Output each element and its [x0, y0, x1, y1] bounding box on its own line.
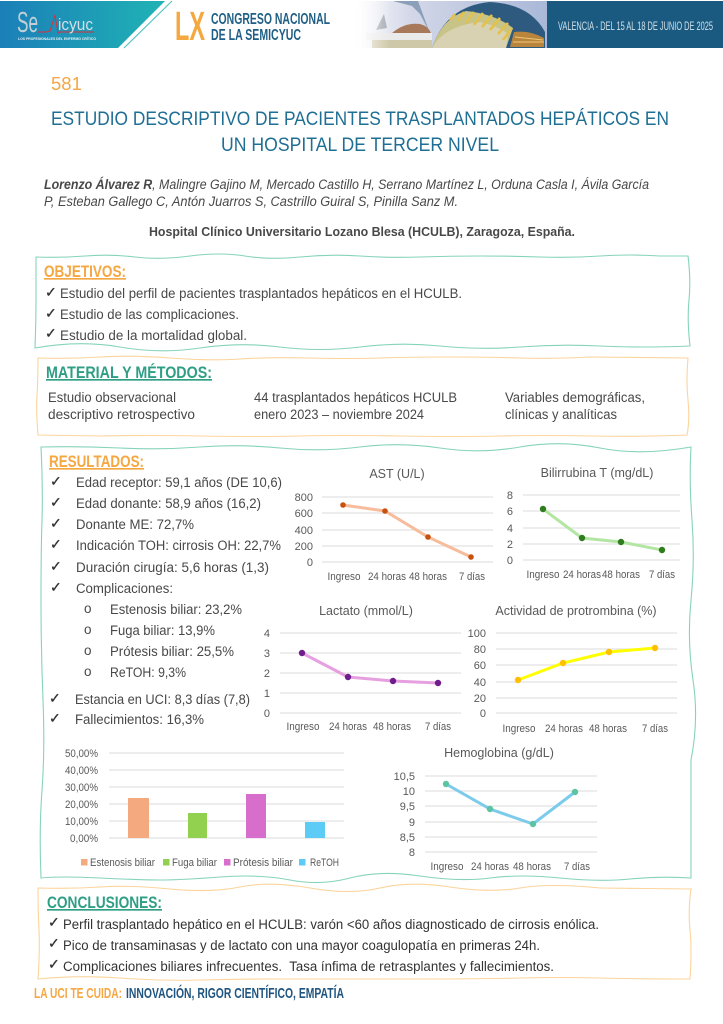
- results list: Prótesis biliar: 25,5%: [110, 644, 234, 659]
- chart: bilirrubina: [507, 466, 680, 581]
- chart: lactato: 0: [264, 708, 270, 720]
- chart: actividad de protrombina: 40: [474, 677, 486, 689]
- chart: actividad de protrombina: 60: [474, 660, 486, 672]
- results list: ✓: [50, 559, 62, 575]
- authors: Lorenzo Álvarez R, Malingre Gajino M, Mercado Castillo H, Serrano Martínez L, Orduna Casla I, Ávila García: [44, 177, 649, 192]
- chart: AST: 400: [295, 525, 313, 537]
- chart: hemoglobina: 9: [409, 817, 415, 829]
- logo panel: Semicyuc: Se: [17, 7, 38, 39]
- chart: bilirrubina: 24 horas: [563, 569, 601, 581]
- results list: Donante ME: 72,7%: [76, 517, 194, 532]
- objectives list: ✓: [45, 285, 57, 301]
- logo panel: Semicyuc: LOS PROFESIONALES DEL ENFERMO CRÍTICO: [18, 36, 96, 41]
- method: design: Estudio observacional: [48, 390, 176, 405]
- congress title: LX: [175, 3, 205, 49]
- results list: Fallecimientos: 16,3%: [75, 712, 204, 727]
- bar chart: complicaciones: 30,00%: [65, 782, 98, 794]
- chart legend: Fuga biliar: [172, 857, 217, 869]
- chart: AST: 7 días: [459, 571, 485, 583]
- chart legend: Prótesis biliar: [233, 857, 293, 869]
- header photo: Valencia architecture: [352, 1, 548, 48]
- method: variables: [505, 390, 645, 422]
- method: design: descriptivo retrospectivo: [48, 407, 195, 422]
- bar chart: complicaciones: 40,00%: [65, 765, 98, 777]
- congress title: DE LA SEMICYUC: [211, 27, 301, 44]
- footer tagline: LA UCI TE CUIDA:: [34, 985, 122, 1002]
- chart: actividad de protrombina: 80: [474, 644, 486, 656]
- logo panel: Semicyuc: icyuc: [58, 15, 93, 34]
- results list: Indicación TOH: cirrosis OH: 22,7%: [76, 538, 281, 553]
- conclusions list: Complicaciones biliares infrecuentes. Tasa ínfima de retrasplantes y fallecimientos.: [63, 959, 554, 974]
- results list: ✓: [50, 580, 62, 596]
- chart: hemoglobina: 9,5: [400, 801, 415, 813]
- chart: bilirrubina: 0: [507, 555, 513, 567]
- chart: actividad de protrombina: Ingreso: [502, 723, 536, 735]
- results list: o: [84, 601, 92, 616]
- footer tagline: [34, 984, 344, 1002]
- bar chart: complicaciones: [65, 748, 344, 869]
- chart: hemoglobina: Ingreso: [430, 861, 464, 873]
- chart: lactato: Lactato (mmol/L): [319, 604, 413, 618]
- method: design: [48, 390, 195, 422]
- chart: AST: AST (U/L): [369, 467, 425, 481]
- panel: conclusiones: [38, 884, 691, 980]
- header banner: [0, 1, 723, 49]
- heading: material y métodos: MATERIAL Y MÉTODOS:: [46, 363, 212, 382]
- chart: lactato: 2: [264, 668, 270, 680]
- conclusions list: Perfil trasplantado hepático en el HCULB: varón <60 años diagnosticado de cirrosis enólica.: [63, 917, 599, 932]
- objectives list: Estudio de la mortalidad global.: [60, 328, 247, 343]
- chart: lactato: Ingreso: [286, 721, 320, 733]
- results list: Duración cirugía: 5,6 horas (1,3): [76, 560, 269, 575]
- objectives list: Estudio del perfil de pacientes trasplantados hepáticos en el HCULB.: [60, 286, 462, 301]
- objectives list: ✓: [45, 306, 57, 322]
- bar chart: complicaciones: 20,00%: [65, 799, 98, 811]
- chart: hemoglobina: 48 horas: [513, 861, 551, 873]
- results list: Estancia en UCI: 8,3 días (7,8): [75, 692, 250, 707]
- bar chart: complicaciones: 10,00%: [65, 816, 98, 828]
- results list: ✓: [49, 691, 61, 707]
- title: [51, 107, 669, 156]
- chart: actividad de protrombina: 0: [480, 708, 486, 720]
- chart: AST: 200: [295, 541, 313, 553]
- results list: ✓: [50, 495, 62, 511]
- conclusions list: Pico de transaminasas y de lactato con una mayor coagulopatía en primeras 24h.: [63, 938, 540, 953]
- chart: AST: [295, 467, 493, 583]
- chart: AST: 24 horas: [368, 571, 406, 583]
- chart: hemoglobina: 10: [403, 786, 415, 798]
- title: UN HOSPITAL DE TERCER NIVEL: [221, 134, 499, 156]
- conclusions list: [48, 915, 599, 974]
- conclusions list: ✓: [48, 936, 60, 952]
- chart: bilirrubina: 2: [507, 539, 513, 551]
- method: variables: clínicas y analíticas: [505, 407, 617, 422]
- chart: lactato: [264, 604, 461, 733]
- bar chart: complicaciones: 0,00%: [70, 833, 98, 845]
- results list: o: [84, 622, 92, 637]
- results list: Edad receptor: 59,1 años (DE 10,6): [76, 475, 282, 490]
- chart: bilirrubina: Ingreso: [526, 569, 560, 581]
- panel: material y métodos: [37, 356, 689, 436]
- chart: bilirrubina: 6: [507, 506, 513, 518]
- bar chart: complicaciones: 50,00%: [65, 748, 98, 760]
- heading: conclusiones: CONCLUSIONES:: [47, 894, 162, 912]
- chart: bilirrubina: 48 horas: [602, 569, 640, 581]
- chart: AST: Ingreso: [328, 571, 360, 583]
- results list: Complicaciones:: [76, 581, 173, 596]
- chart: bilirrubina: 8: [507, 490, 513, 502]
- objectives list: [45, 285, 462, 343]
- chart: lactato: 1: [264, 688, 270, 700]
- chart: bilirrubina: Bilirrubina T (mg/dL): [541, 466, 653, 480]
- chart: lactato: 4: [264, 628, 270, 640]
- chart: AST: 48 horas: [409, 571, 447, 583]
- chart: actividad de protrombina: 20: [474, 693, 486, 705]
- results list: Estenosis biliar: 23,2%: [110, 602, 242, 617]
- panel: resultados: [40, 444, 696, 883]
- chart legend: ReTOH: [310, 857, 339, 869]
- chart: lactato: 3: [264, 648, 270, 660]
- chart: lactato: 24 horas: [329, 721, 367, 733]
- method: sample: [254, 390, 457, 422]
- chart: lactato: 48 horas: [373, 721, 411, 733]
- conclusions list: ✓: [48, 957, 60, 973]
- congress title: CONGRESO NACIONAL: [211, 11, 330, 28]
- results list: Fuga biliar: 13,9%: [110, 623, 215, 638]
- abstract number: 581: [51, 73, 82, 94]
- chart legend: [81, 857, 339, 869]
- chart: hemoglobina: 7 días: [564, 861, 590, 873]
- chart: lactato: 7 días: [425, 721, 451, 733]
- chart: AST: 600: [295, 508, 313, 520]
- heading: objetivos: OBJETIVOS:: [44, 263, 126, 281]
- results list: ✓: [50, 474, 62, 490]
- results list: ✓: [50, 516, 62, 532]
- authors: [44, 177, 649, 209]
- affiliation: Hospital Clínico Universitario Lozano Blesa (HCULB), Zaragoza, España.: [149, 225, 575, 239]
- congress title: [175, 3, 330, 49]
- chart: actividad de protrombina: 48 horas: [589, 723, 627, 735]
- objectives list: Estudio de las complicaciones.: [60, 307, 239, 322]
- logo panel: Semicyuc: [0, 1, 172, 48]
- date band: [547, 1, 723, 48]
- method: sample: enero 2023 – noviembre 2024: [254, 407, 424, 422]
- authors: P, Esteban Gallego C, Antón Juarros S, Castrillo Guiral S, Pinilla Sanz M.: [44, 194, 458, 209]
- results list: ✓: [50, 537, 62, 553]
- method: sample: 44 trasplantados hepáticos HCULB: [254, 390, 457, 405]
- chart: actividad de protrombina: 24 horas: [545, 723, 583, 735]
- heading: resultados: RESULTADOS:: [49, 453, 144, 471]
- results list: [49, 474, 282, 727]
- footer tagline: INNOVACIÓN, RIGOR CIENTÍFICO, EMPATÍA: [126, 984, 344, 1002]
- chart: hemoglobina: 10,5: [394, 771, 415, 783]
- results list: o: [84, 664, 92, 679]
- chart: actividad de protrombina: Actividad de protrombina (%): [495, 604, 657, 618]
- chart: actividad de protrombina: 100: [468, 628, 486, 640]
- chart legend: Estenosis biliar: [90, 857, 155, 869]
- chart: actividad de protrombina: [468, 604, 677, 735]
- chart: hemoglobina: [394, 746, 597, 873]
- chart: hemoglobina: 24 horas: [471, 861, 509, 873]
- chart: hemoglobina: 8: [409, 847, 415, 859]
- chart: AST: 0: [307, 557, 313, 569]
- chart: bilirrubina: 4: [507, 523, 513, 535]
- chart: AST: 800: [295, 492, 313, 504]
- conclusions list: ✓: [48, 915, 60, 931]
- results list: Edad donante: 58,9 años (16,2): [76, 496, 261, 511]
- chart: hemoglobina: Hemoglobina (g/dL): [444, 746, 554, 760]
- results list: ReTOH: 9,3%: [110, 665, 186, 680]
- method: variables: Variables demográficas,: [505, 390, 645, 405]
- chart: hemoglobina: 8,5: [400, 832, 415, 844]
- results list: o: [84, 643, 92, 658]
- results list: ✓: [49, 711, 61, 727]
- chart: bilirrubina: 7 días: [649, 569, 675, 581]
- panel: objetivos: [35, 254, 690, 351]
- objectives list: ✓: [45, 326, 57, 342]
- chart: actividad de protrombina: 7 días: [642, 723, 668, 735]
